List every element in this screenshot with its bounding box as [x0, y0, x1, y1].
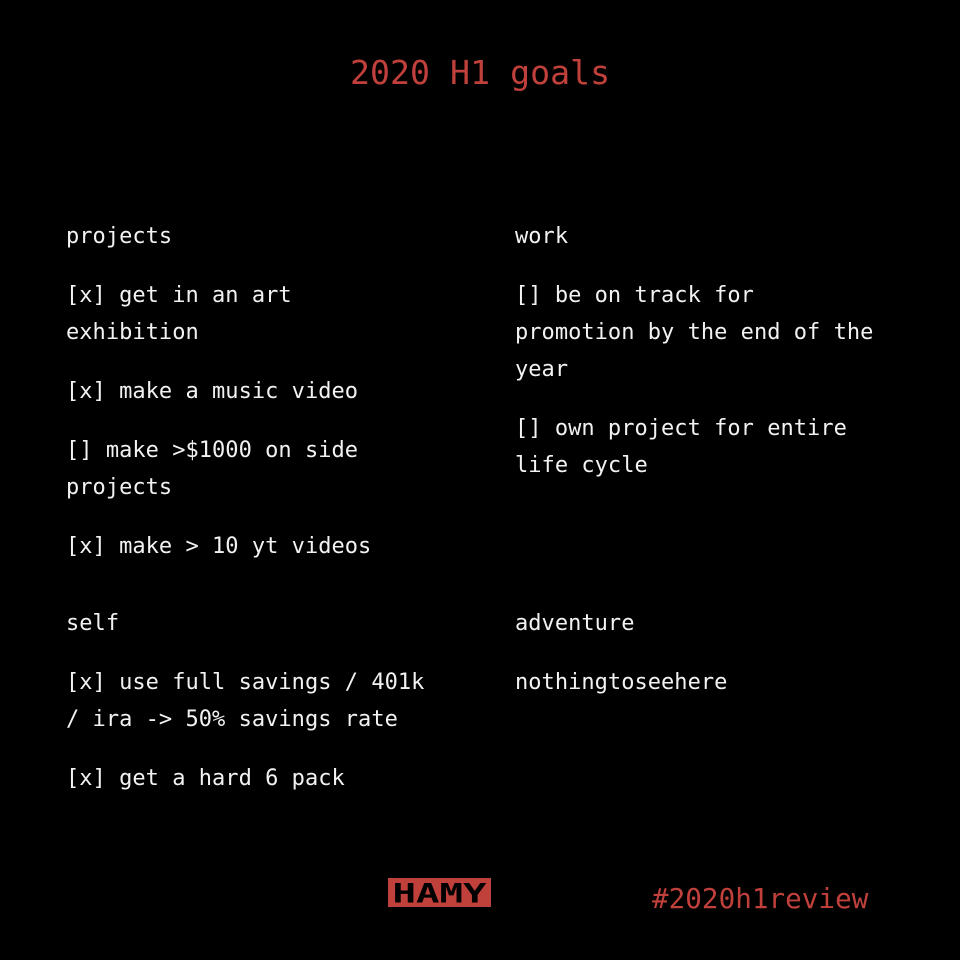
- hashtag: #2020h1review: [652, 882, 868, 915]
- goal: savings: [x] use full savings / 401k / ira -> 50% savings rate: [66, 670, 424, 732]
- panel: projects: [66, 224, 371, 559]
- goal: art exhibition: [x] get in an art exhibition: [66, 283, 292, 345]
- panel: self: [66, 611, 424, 791]
- goal: music video: [x] make a music video: [66, 379, 358, 404]
- logo: HAMY: [388, 878, 491, 907]
- heading: adventure: adventure: [515, 611, 634, 636]
- goal: 6 pack: [x] get a hard 6 pack: [66, 766, 345, 791]
- goal: promotion: [] be on track for promotion by the end of the year: [515, 283, 873, 382]
- goal: side projects: [] make >$1000 on side projects: [66, 438, 358, 500]
- panel: work: [515, 224, 873, 478]
- title: 2020 H1 goals: [350, 53, 610, 92]
- goal: yt videos: [x] make > 10 yt videos: [66, 534, 371, 559]
- goal: own project: [] own project for entire life cycle: [515, 416, 847, 478]
- heading: projects: projects: [66, 224, 172, 249]
- heading: work: work: [515, 224, 568, 249]
- text: nothingtoseehere: nothingtoseehere: [515, 670, 727, 695]
- heading: self: self: [66, 611, 119, 636]
- panel: adventure: [515, 611, 727, 695]
